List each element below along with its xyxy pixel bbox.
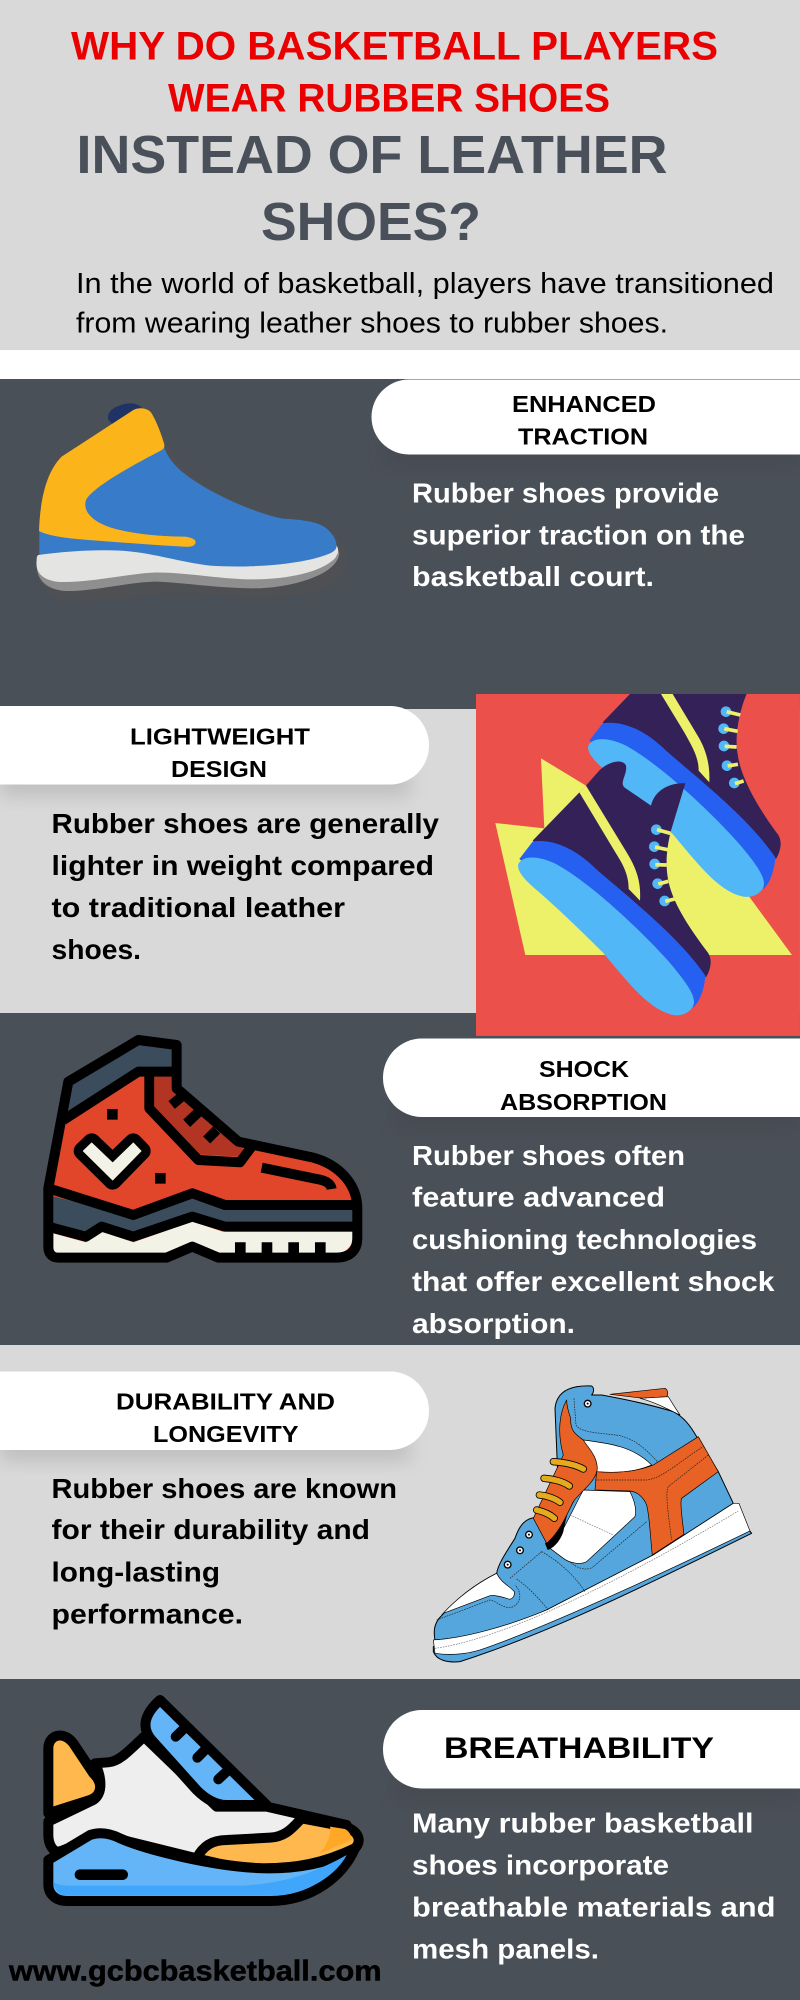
heading pill: enhanced traction: ENHANCED — [512, 391, 656, 417]
panel: durability and longevity — [0, 1345, 800, 1679]
subtitle in grey — [76, 125, 668, 252]
icon: blue and orange high-top sneaker — [433, 1386, 752, 1662]
panel: breathability — [0, 1679, 800, 2000]
body text: traction — [412, 478, 745, 592]
subtitle in grey: INSTEAD OF LEATHER — [76, 125, 668, 185]
title in red: WHY DO BASKETBALL PLAYERS — [71, 24, 718, 68]
icon: red hiking-style boot — [48, 1040, 357, 1258]
title in red: WEAR RUBBER SHOES — [168, 76, 610, 120]
body text: lightweight — [52, 808, 439, 965]
heading pill: durability: LONGEVITY — [153, 1421, 299, 1447]
body text: durability — [52, 1473, 397, 1630]
body text: durability: long-lasting — [52, 1556, 220, 1588]
body text: breathability: mesh panels. — [412, 1934, 599, 1964]
heading pill: enhanced traction: TRACTION — [518, 424, 648, 450]
body text: breathability: breathable materials and — [412, 1892, 776, 1922]
panel: lightweight design — [0, 694, 800, 1036]
body text: breathability — [412, 1808, 776, 1964]
body text: shock absorption: absorption. — [412, 1308, 575, 1339]
heading pill: durability — [0, 1372, 429, 1450]
heading pill: breathability — [383, 1710, 800, 1788]
intro text: from wearing leather shoes to rubber shoes. — [76, 308, 668, 340]
body text: shock absorption: feature advanced — [412, 1182, 665, 1212]
footer url: www.gcbcbasketball.com — [8, 1956, 382, 1988]
heading pill: lightweight design: LIGHTWEIGHT — [130, 724, 311, 750]
body text: shock absorption — [412, 1140, 775, 1339]
panel: header — [0, 0, 800, 350]
body text: breathability: Many rubber basketball — [412, 1808, 754, 1838]
body text: breathability: shoes incorporate — [412, 1850, 669, 1880]
body text: durability: for their durability and — [52, 1514, 370, 1545]
heading pill: lightweight design — [0, 706, 429, 784]
icon: lower sneaker — [518, 761, 711, 1015]
heading pill: durability: DURABILITY AND — [116, 1388, 335, 1414]
heading pill: shock absorption: SHOCK — [539, 1056, 629, 1082]
body text: traction: basketball court. — [412, 561, 654, 592]
intro text: In the world of basketball, players have transitioned — [76, 268, 774, 300]
body text: traction: superior traction on the — [412, 520, 745, 550]
panel: enhanced traction — [0, 379, 800, 709]
body text: shock absorption: cushioning technologies — [412, 1224, 757, 1255]
heading pill: lightweight design: DESIGN — [171, 756, 267, 782]
body text: lightweight: Rubber shoes are generally — [52, 808, 439, 839]
panel: shock absorption — [0, 1013, 800, 1345]
heading pill: shock absorption: ABSORPTION — [500, 1089, 667, 1115]
heading pill: enhanced traction — [372, 380, 800, 454]
title in red — [71, 24, 718, 120]
body text: lightweight: lighter in weight compared — [52, 850, 434, 881]
heading pill: breathability: BREATHABILITY — [444, 1732, 714, 1765]
heading pill: shock absorption — [383, 1038, 800, 1117]
icon: blue and yellow high-top shoe — [36, 403, 348, 601]
body text: durability: Rubber shoes are known — [52, 1473, 397, 1504]
illustration: pair of purple sneakers on red square — [476, 694, 800, 1036]
body text: durability: performance. — [52, 1598, 243, 1630]
body text: shock absorption: Rubber shoes often — [412, 1140, 685, 1171]
body text: lightweight: shoes. — [52, 934, 141, 965]
intro text — [76, 268, 774, 340]
icon: blue and orange running shoe — [48, 1700, 359, 1901]
body text: traction: Rubber shoes provide — [412, 478, 719, 508]
icon: upper sneaker — [588, 694, 781, 897]
subtitle in grey: SHOES? — [261, 192, 481, 252]
body text: lightweight: to traditional leather — [52, 892, 345, 923]
body text: shock absorption: that offer excellent shock — [412, 1266, 775, 1297]
